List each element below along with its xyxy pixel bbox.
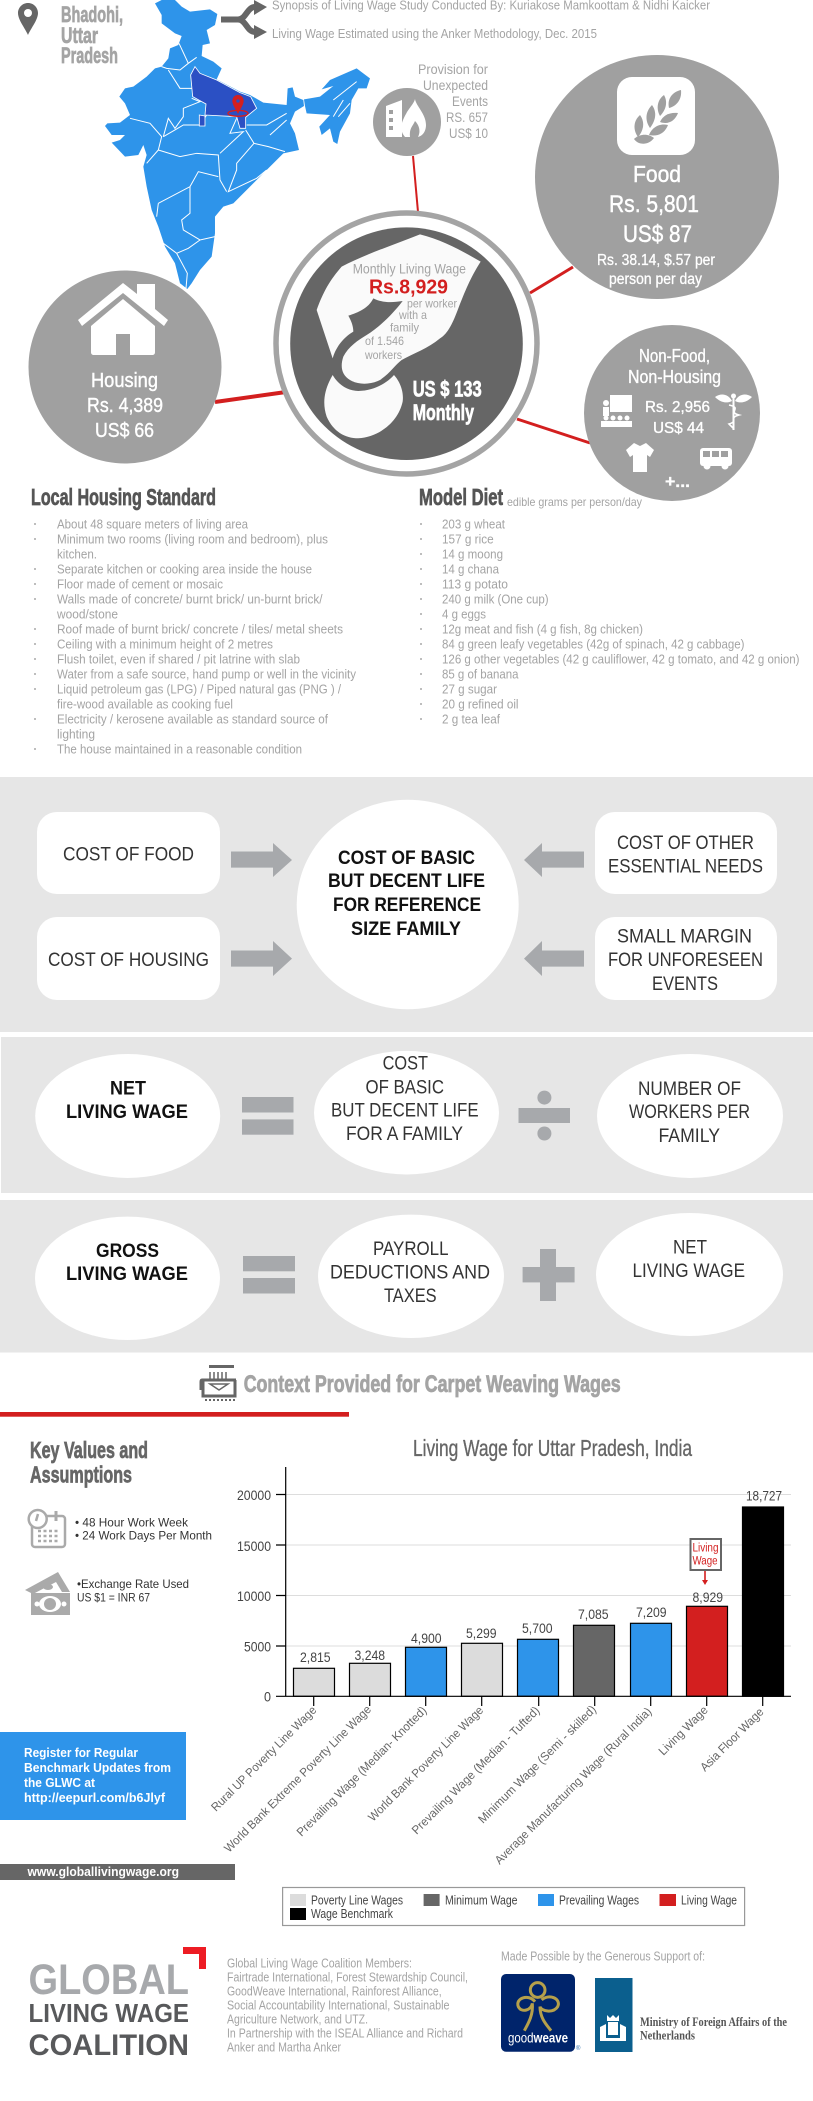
emblem [600, 2015, 626, 2041]
ellipse: net living wage: LIVING WAGE [632, 1260, 745, 1282]
non-food values: Non-Food, [639, 346, 710, 366]
ellipse: workers per family [597, 1054, 783, 1178]
list: housing standard: Minimum two rooms (living room and bedroom), plus [57, 531, 328, 546]
text: support credit: Made Possible by the Generous Support of: [501, 1950, 705, 1964]
list: housing standard: Separate kitchen or cooking area inside the house [57, 561, 312, 576]
text: work week [75, 1516, 212, 1543]
list: housing standard: About 48 square meters of living area [57, 516, 249, 531]
food values: Rs. 5,801 [609, 191, 699, 218]
callout: living wage: Wage [692, 1556, 718, 1568]
ellipse: cost of basic life: SIZE FAMILY [351, 918, 461, 940]
logo: global living wage coalition [28, 1947, 206, 2062]
text: work week: • 48 Hour Work Week [75, 1516, 189, 1530]
category labels: Prevailing Wage (Median - Tufted) [409, 1703, 542, 1837]
ellipse: workers per family: WORKERS PER [629, 1101, 750, 1123]
ellipse: cost of basic life: BUT DECENT LIFE [328, 870, 485, 892]
logo: goodweave: goodweave [508, 2030, 568, 2046]
food values: Rs. 38.14, $.57 per [597, 252, 715, 269]
logo: netherlands ministry: Netherlands [640, 2027, 695, 2042]
panel: gross living wage [0, 1200, 813, 1352]
list: model diet: 4 g eggs [442, 606, 486, 621]
text: coalition members: Fairtrade International, Forest Stewardship Council, [227, 1970, 468, 1984]
ellipse: cost for a family: COST [383, 1053, 428, 1075]
logo: global living wage coalition: COALITION [28, 2029, 189, 2062]
list: model diet: 27 g sugar [442, 681, 498, 696]
circle: food [535, 55, 779, 299]
list: housing standard: fire-wood available as cooking fuel [57, 696, 233, 711]
text: provision: RS. 657 [446, 109, 488, 125]
ellipse: net living wage: NET [673, 1237, 707, 1259]
ellipse: cost of basic life [297, 800, 519, 1009]
ellipse: gross living wage: LIVING WAGE [66, 1263, 188, 1285]
wage figures: workers [364, 348, 402, 362]
icon: t-shirt [626, 443, 654, 472]
box: small margin: FOR UNFORESEEN [608, 949, 763, 971]
list: model diet: 85 g of banana [442, 666, 519, 681]
value labels [300, 1488, 782, 1665]
icon: bus [700, 448, 732, 470]
food values [597, 161, 715, 288]
icon: banknotes [25, 1572, 70, 1615]
legend: Prevailing Wages [559, 1893, 639, 1907]
list: model diet: 14 g chana [442, 561, 500, 576]
value labels: 7,209 [636, 1604, 667, 1620]
housing values: Rs. 4,389 [87, 395, 163, 417]
heading: model diet: Model Diet [419, 484, 503, 510]
icon: wheat [617, 77, 695, 155]
icon: classroom [601, 395, 632, 427]
list: model diet: 203 g wheat [442, 516, 505, 531]
category labels: Minimum Wage (Semi - skilled) [475, 1702, 599, 1826]
logo: netherlands ministry [595, 1978, 787, 2052]
red divider bar [0, 1412, 349, 1417]
ellipse: cost for a family: FOR A FAMILY [346, 1123, 463, 1145]
ellipse: cost for a family: OF BASIC [366, 1076, 444, 1098]
callout: register: Register for Regular [24, 1746, 138, 1760]
list: housing standard: kitchen. [57, 546, 97, 561]
text: provision: Provision for [418, 61, 488, 77]
circle: housing [28, 270, 222, 464]
text: coalition members: Social Accountability International, Sustainable [227, 1998, 450, 2012]
legend: Wage Benchmark [311, 1907, 394, 1921]
text: work week: • 24 Work Days Per Month [75, 1529, 212, 1543]
wage figures [353, 260, 482, 425]
list: housing standard: Electricity / kerosene available as standard source of [57, 711, 328, 726]
food values: Food [633, 161, 681, 187]
list: model diet [420, 516, 800, 726]
text: provision: Events [452, 93, 488, 109]
website bar [0, 1864, 235, 1880]
list: housing standard: Roof made of burnt brick/ concrete / tiles/ metal sheets [57, 621, 343, 636]
box: other essential needs: COST OF OTHER [617, 832, 754, 854]
wage figures: per worker [407, 296, 457, 310]
value labels: 8,929 [692, 1589, 723, 1605]
text: coalition members: In Partnership with the ISEAL Alliance and Richard [227, 2026, 463, 2040]
y axis labels: 5000 [244, 1639, 271, 1655]
circle: non-food non-housing [584, 325, 760, 501]
y axis labels: 15000 [237, 1538, 271, 1554]
logo: global living wage coalition: GLOBAL [28, 1956, 189, 2004]
list: model diet: 157 g rice [442, 531, 494, 546]
website bar: www.globallivingwage.org [27, 1865, 179, 1879]
text: exchange rate: US $1 = INR 67 [77, 1591, 150, 1605]
value labels: 7,085 [578, 1606, 609, 1622]
ellipse: workers per family: FAMILY [658, 1125, 720, 1147]
text: provision: Unexpected [423, 77, 488, 93]
housing values: Housing [91, 370, 158, 392]
stomach icon [317, 234, 481, 438]
heading: key values [30, 1437, 148, 1488]
non-food values: Non-Housing [628, 367, 721, 387]
wage figures: of 1.546 [365, 334, 404, 348]
ellipse: payroll deductions: PAYROLL [373, 1238, 449, 1260]
panel: net living wage [1, 1037, 813, 1193]
circle: unexpected events [373, 88, 441, 156]
arrows [231, 843, 584, 976]
logo: global living wage coalition: LIVING WAGE [28, 2000, 189, 2028]
callout: register [0, 1732, 186, 1820]
category labels: Rural UP Poverty Line Wage [208, 1703, 319, 1814]
category labels: Prevailing Wage (Median- Knotted) [294, 1703, 429, 1839]
ellipse: gross living wage: GROSS [96, 1240, 159, 1262]
list: model diet: 14 g moong [442, 546, 503, 561]
box: other essential needs [595, 812, 777, 894]
study credits [272, 0, 711, 41]
non-food values: US$ 44 [653, 420, 704, 437]
list: housing standard: Floor made of cement or mosaic [57, 576, 223, 591]
chart title: Living Wage for Uttar Pradesh, India [413, 1435, 692, 1461]
list: housing standard: lighting [57, 726, 95, 741]
value labels: 2,815 [300, 1649, 331, 1665]
legend: Minimum Wage [445, 1893, 518, 1907]
y axis labels: 0 [264, 1689, 271, 1705]
callout: living wage [690, 1539, 721, 1585]
legend: Living Wage [681, 1893, 737, 1907]
ellipse: net living wage: NET [110, 1078, 146, 1100]
ellipse: cost for a family [314, 1051, 499, 1174]
bar chart [208, 1467, 791, 1867]
heading: context: Context Provided for Carpet Weaving Wages [244, 1371, 621, 1398]
heading: model diet [419, 484, 642, 510]
legend [283, 1888, 745, 1926]
callout: register: Benchmark Updates from [24, 1761, 171, 1775]
list: housing standard: The house maintained in a reasonable condition [57, 741, 302, 756]
location pin icon [18, 3, 38, 35]
wage figures: Monthly Living Wage [353, 260, 466, 276]
list: model diet: 240 g milk (One cup) [442, 591, 549, 606]
location label: Uttar [61, 23, 98, 48]
list: model diet: 84 g green leafy vegetables (42g of spinach, 42 g cabbage) [442, 636, 744, 651]
connector lines [215, 156, 590, 443]
category labels: World Bank Extreme Poverty Line Wage [221, 1702, 374, 1855]
location label: Bhadohi, [61, 2, 123, 27]
list: housing standard: Walls made of concrete/ burnt brick/ un-burnt brick/ [57, 591, 323, 606]
icon: carpet loom [201, 1365, 236, 1400]
text: exchange rate: •Exchange Rate Used [77, 1577, 189, 1591]
ellipse: payroll deductions [318, 1215, 504, 1338]
value labels: 3,248 [354, 1647, 385, 1663]
text: coalition members: Agriculture Network, and UTZ. [227, 2012, 368, 2026]
value labels: 18,727 [746, 1488, 782, 1504]
callout: register: the GLWC at [24, 1776, 96, 1790]
logo: goodweave [501, 1974, 581, 2052]
non-food values: +... [665, 472, 690, 491]
icon: calendar and clock [29, 1510, 65, 1547]
food values: person per day [609, 271, 702, 288]
ellipse: payroll deductions: TAXES [384, 1285, 437, 1307]
ellipse: payroll deductions: DEDUCTIONS AND [330, 1262, 490, 1284]
text: provision: US$ 10 [449, 125, 488, 141]
text: coalition members: Anker and Martha Anker [227, 2040, 341, 2054]
heading: key values: Assumptions [30, 1462, 132, 1488]
wage figures: US $ 133 [413, 377, 482, 402]
category labels [208, 1702, 767, 1867]
plus sign [523, 1249, 575, 1301]
ellipse: net living wage [35, 1054, 220, 1178]
location label [61, 2, 123, 68]
text: provision [418, 61, 488, 141]
value labels: 4,900 [411, 1630, 442, 1646]
box: cost of food [37, 812, 220, 894]
location label: Pradesh [61, 43, 118, 68]
icon: caduceus [715, 394, 752, 430]
category labels: Asia Floor Wage [697, 1705, 767, 1774]
central badge: monthly living wage [276, 213, 537, 474]
box: cost of food: COST OF FOOD [63, 844, 194, 866]
list: model diet: 2 g tea leaf [442, 711, 500, 726]
category labels: World Bank Poverty Line Wage [365, 1703, 486, 1824]
category labels: Average Manufacturing Wage (Rural India) [492, 1704, 654, 1867]
text: exchange rate [77, 1577, 189, 1605]
ellipse: cost of basic life: COST OF BASIC [338, 847, 475, 869]
ellipse: cost of basic life: FOR REFERENCE [333, 894, 481, 916]
divide sign [518, 1091, 570, 1140]
box: cost of housing: COST OF HOUSING [48, 949, 209, 971]
axes [276, 1467, 791, 1706]
housing values [87, 370, 163, 442]
heading: key values: Key Values and [30, 1437, 148, 1463]
list: housing standard [34, 516, 356, 756]
text: coalition members: Global Living Wage Coalition Members: [227, 1956, 412, 1970]
y axis labels: 20000 [237, 1487, 271, 1503]
list: housing standard: wood/stone [56, 606, 118, 621]
food values: US$ 87 [623, 221, 692, 248]
non-food values [628, 346, 721, 491]
heading: local housing standard: Local Housing Standard [31, 484, 216, 510]
list: housing standard: Ceiling with a minimum height of 2 metres [57, 636, 273, 651]
branching arrow icon [221, 0, 267, 39]
wage figures: family [390, 321, 419, 335]
y axis labels [237, 1487, 271, 1705]
list: housing standard: Flush toilet, even if shared / pit latrine with slab [57, 651, 300, 666]
wage figures: with a [398, 308, 427, 322]
box: small margin [595, 917, 777, 1000]
ellipse: net living wage [596, 1213, 783, 1336]
box: small margin: EVENTS [652, 973, 718, 995]
ellipse: gross living wage [35, 1217, 220, 1340]
study credits: Living Wage Estimated using the Anker Methodology, Dec. 2015 [272, 26, 597, 41]
callout: living wage: Living [692, 1542, 718, 1554]
logo: goodweave: ® [576, 2045, 581, 2052]
map of India [105, 0, 370, 289]
box: small margin: SMALL MARGIN [617, 926, 752, 948]
value labels: 5,700 [522, 1620, 553, 1636]
housing values: US$ 66 [95, 420, 154, 442]
callout: register: http://eepurl.com/b6Jlyf [24, 1791, 166, 1805]
list: housing standard: Water from a safe source, hand pump or well in the vicinity [57, 666, 356, 681]
list: model diet: 20 g refined oil [442, 696, 519, 711]
box: cost of housing [37, 917, 220, 1000]
ellipse: workers per family: NUMBER OF [638, 1078, 741, 1100]
box: other essential needs: ESSENTIAL NEEDS [608, 856, 763, 878]
equals sign [243, 1256, 295, 1294]
wage figures: Rs.8,929 [369, 276, 448, 298]
icon: building on fire [386, 99, 426, 137]
wage figures: Monthly [413, 400, 475, 425]
ellipse: net living wage: LIVING WAGE [66, 1101, 188, 1123]
bars [294, 1507, 784, 1696]
list: model diet: 12g meat and fish (4 g fish, 8g chicken) [442, 621, 643, 636]
text: coalition members [227, 1956, 468, 2054]
category labels: Living Wage [656, 1703, 711, 1758]
list: housing standard: Liquid petroleum gas (LPG) / Piped natural gas (PNG ) / [57, 681, 341, 696]
list: model diet: 113 g potato [442, 576, 508, 591]
icon: house [78, 283, 168, 355]
non-food values: Rs. 2,956 [645, 399, 710, 416]
ellipse: cost for a family: BUT DECENT LIFE [331, 1100, 479, 1122]
text: coalition members: GoodWeave International, Rainforest Alliance, [227, 1984, 442, 1998]
equals sign [242, 1097, 294, 1135]
heading: model diet: edible grams per person/day [507, 495, 642, 509]
legend: Poverty Line Wages [311, 1893, 403, 1907]
y axis labels: 10000 [237, 1588, 271, 1604]
panel: cost of basic life [0, 777, 813, 1032]
value labels: 5,299 [466, 1625, 497, 1641]
